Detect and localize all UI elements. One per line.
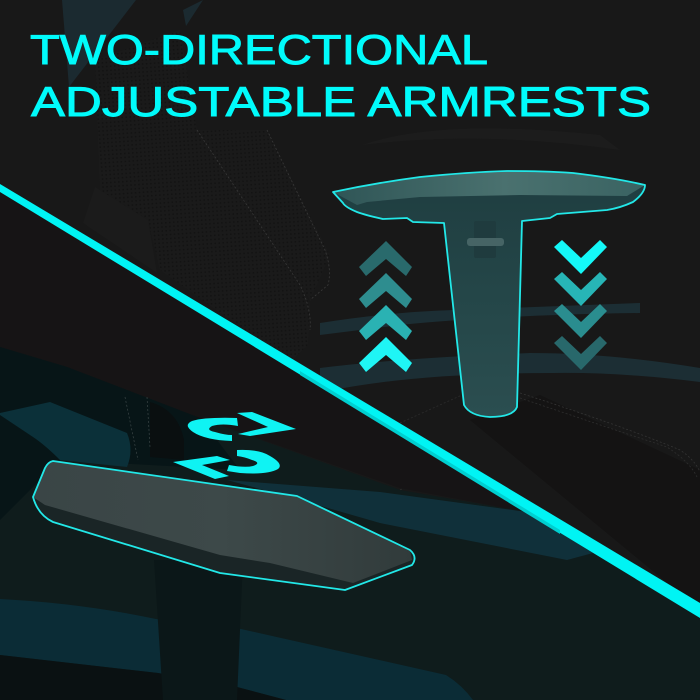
diagonal glowing divider <box>0 184 700 618</box>
armrest top face <box>33 461 412 583</box>
down chevrons <box>554 240 607 370</box>
up chevrons <box>359 241 412 372</box>
lower armrest rotated view <box>33 461 415 590</box>
teal chair side panel <box>0 402 130 467</box>
lower armrest post <box>154 560 243 700</box>
curled shadow <box>150 402 184 460</box>
upper armrest with height-adjustable stem <box>333 171 645 417</box>
armrest top surface <box>333 171 645 205</box>
stitching <box>125 397 150 460</box>
title: ADJUSTABLE ARMRESTS <box>31 78 651 125</box>
armrest outline <box>33 461 415 590</box>
armrest outline <box>333 171 645 417</box>
stem lever <box>467 221 504 258</box>
lower teal seat band <box>0 599 473 700</box>
title: TWO-DIRECTIONAL <box>30 26 488 73</box>
title <box>30 26 651 125</box>
teal band right of armrest <box>227 480 593 560</box>
rotation arrows <box>173 412 296 479</box>
lower backdrop: dark teal zone below the diagonal <box>0 190 700 700</box>
